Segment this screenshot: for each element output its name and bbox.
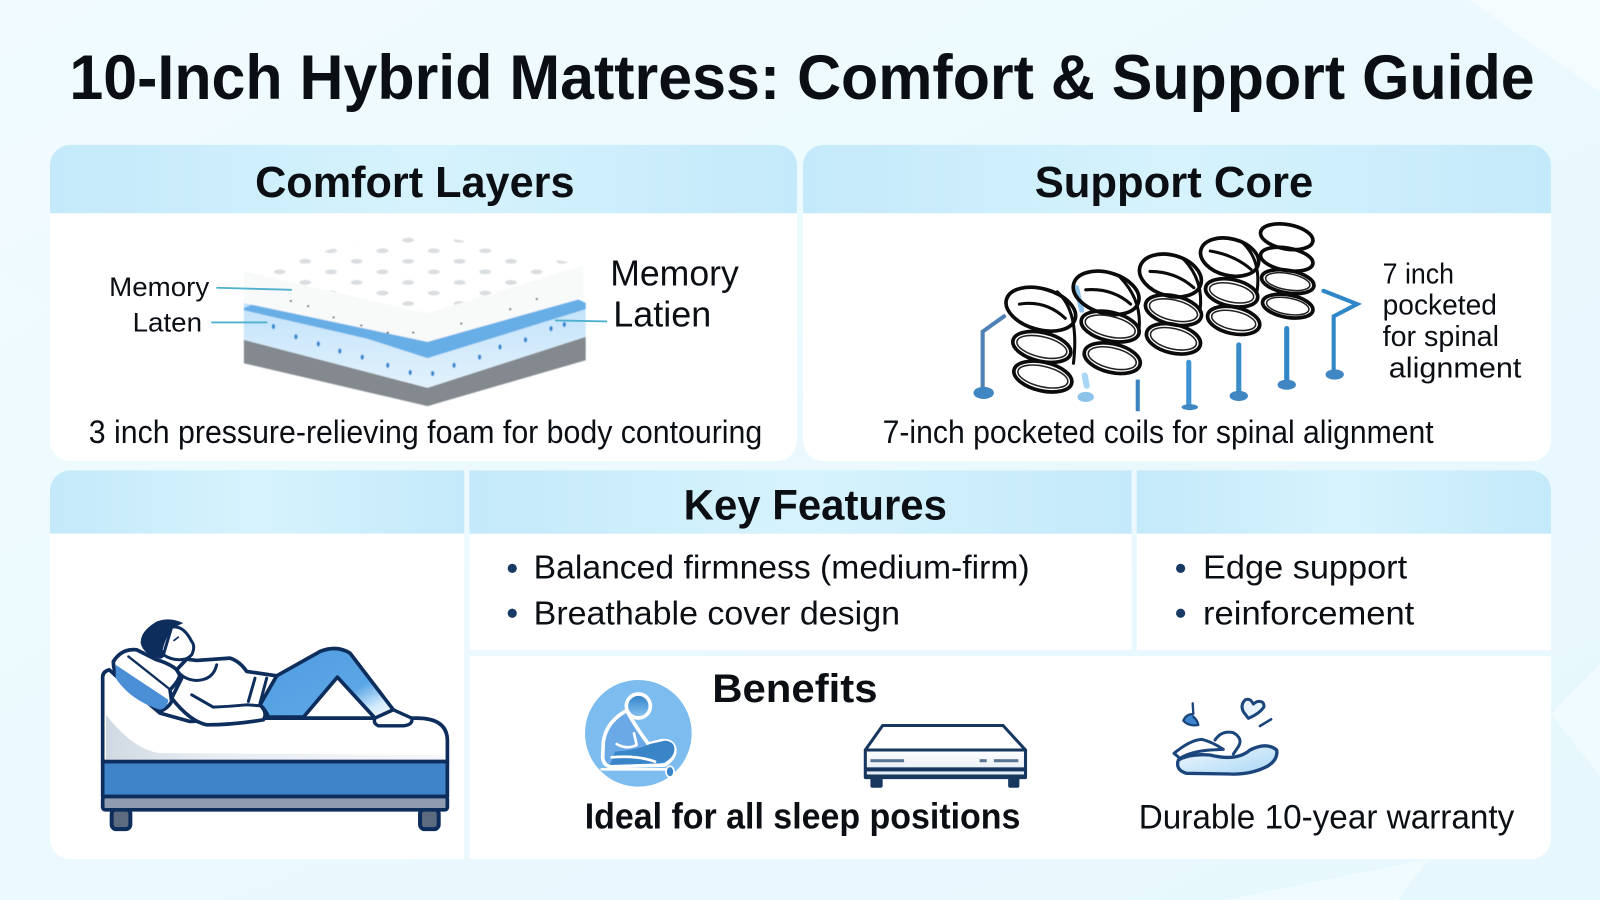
heading: support core: Support Core bbox=[1035, 158, 1313, 207]
side note: coil details: alignment bbox=[1389, 353, 1521, 385]
icon: pillow and hearts bbox=[1174, 699, 1277, 774]
title: 10-Inch Hybrid Mattress: Comfort & Support Guide bbox=[69, 43, 1535, 113]
label: laten left: Laten bbox=[133, 308, 202, 338]
panel: benefits bbox=[469, 656, 1551, 859]
side note: coil details: for spinal bbox=[1383, 321, 1499, 353]
key features header band bbox=[469, 470, 1132, 534]
panel: sleeper illustration bbox=[50, 470, 464, 859]
torso and arm bbox=[172, 658, 277, 725]
side note: coil details: pocketed bbox=[1383, 289, 1497, 321]
feature list right bbox=[1176, 550, 1415, 632]
panel: comfort layers bbox=[50, 145, 797, 461]
foot bbox=[374, 710, 412, 726]
caption: comfort layers: 3 inch pressure-relieving foam for body contouring bbox=[89, 413, 762, 450]
support core header band bbox=[803, 145, 1551, 213]
panel: extra features bbox=[1137, 470, 1551, 650]
bed base bbox=[103, 761, 447, 796]
icon: mattress bbox=[865, 726, 1026, 788]
feature list right: Edge support bbox=[1203, 550, 1408, 587]
side note: coil details bbox=[1383, 259, 1521, 385]
heading: comfort layers: Comfort Layers bbox=[255, 158, 574, 207]
bed legs bbox=[112, 809, 439, 829]
heading: benefits: Benefits bbox=[712, 667, 878, 711]
caption: support core: 7-inch pocketed coils for spinal alignment bbox=[883, 413, 1434, 450]
panel: key features bbox=[469, 470, 1132, 650]
illustration: person on bed bbox=[103, 619, 447, 829]
feature list left: Breathable cover design bbox=[534, 595, 900, 632]
illustration: mattress layers bbox=[244, 230, 586, 406]
extra features header band bbox=[1137, 470, 1551, 534]
comfort layers header band bbox=[50, 145, 797, 213]
benefit: sleep positions: Ideal for all sleep positions bbox=[585, 797, 1020, 837]
feature list left: Balanced firmness (medium-firm) bbox=[534, 550, 1030, 587]
benefit: warranty: Durable 10-year warranty bbox=[1139, 799, 1515, 837]
feature list left bbox=[508, 550, 1030, 632]
leader line: laten left bbox=[211, 321, 267, 323]
legs bbox=[260, 649, 393, 718]
label: memory left: Memory bbox=[109, 272, 210, 302]
feature list right: reinforcement bbox=[1203, 595, 1415, 632]
head bbox=[163, 627, 194, 660]
illustration: pocketed coils bbox=[973, 220, 1357, 411]
sleeper panel header band bbox=[50, 470, 464, 534]
icon: seated person bbox=[585, 680, 692, 787]
label: latien right: Latien bbox=[613, 295, 711, 335]
label: memory right: Memory bbox=[610, 254, 739, 294]
mattress bbox=[103, 670, 447, 761]
pillow bbox=[113, 650, 180, 711]
side note: coil details: 7 inch bbox=[1383, 259, 1454, 291]
leader line: latien right bbox=[555, 320, 607, 321]
leader line: memory left bbox=[216, 288, 292, 290]
panel: support core bbox=[803, 145, 1551, 461]
heading: key features: Key Features bbox=[684, 481, 947, 529]
